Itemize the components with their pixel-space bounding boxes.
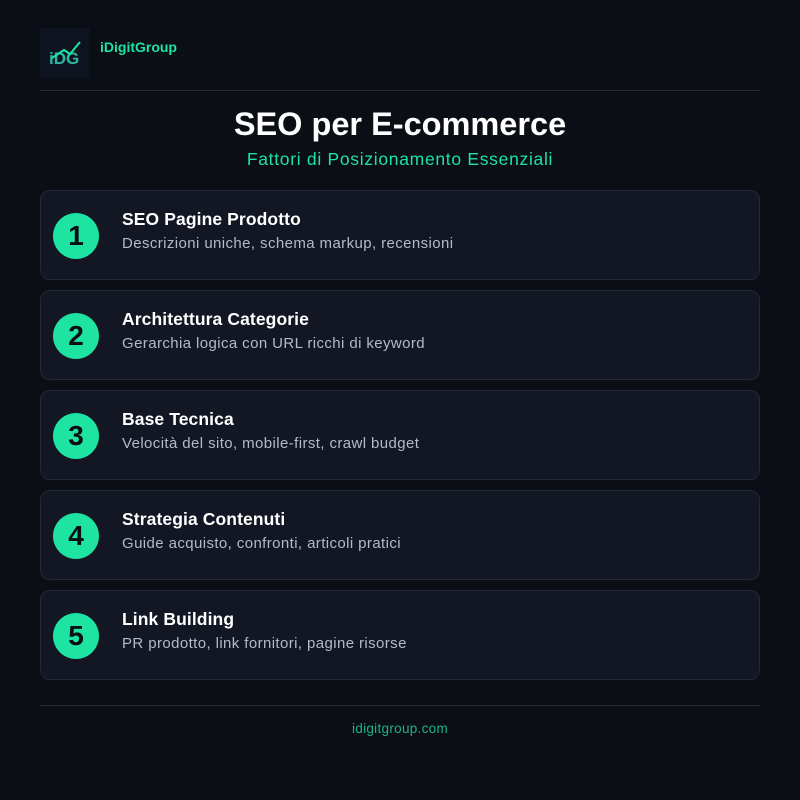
card 1: 1 (68, 220, 84, 251)
card 3: 3 (68, 420, 84, 451)
card 4: 4 (68, 520, 84, 551)
footer: idigitgroup.com (352, 721, 448, 736)
logo: iDG (49, 49, 79, 68)
card 4 (40, 490, 760, 580)
card 2: Gerarchia logica con URL ricchi di keyword (122, 335, 425, 352)
card 4: Guide acquisto, confronti, articoli pratici (122, 535, 401, 552)
card 5: Link Building (122, 609, 234, 629)
card 5 (40, 590, 760, 680)
card 2: 2 (68, 320, 84, 351)
card 5: 5 (68, 620, 84, 651)
card 1: Descrizioni uniche, schema markup, recensioni (122, 235, 453, 252)
card 1: SEO Pagine Prodotto (122, 209, 301, 229)
card 3: Velocità del sito, mobile-first, crawl budget (122, 435, 419, 452)
card 2 (40, 290, 760, 380)
title: SEO per E-commerce (234, 106, 566, 142)
logo (40, 28, 90, 78)
subtitle: Fattori di Posizionamento Essenziali (247, 149, 553, 169)
card 5: PR prodotto, link fornitori, pagine risorse (122, 635, 407, 652)
card 3: Base Tecnica (122, 409, 234, 429)
card 2: Architettura Categorie (122, 309, 309, 329)
card 3 (40, 390, 760, 480)
card 1 (40, 190, 760, 280)
brand name: iDigitGroup (100, 39, 177, 55)
card 4: Strategia Contenuti (122, 509, 285, 529)
